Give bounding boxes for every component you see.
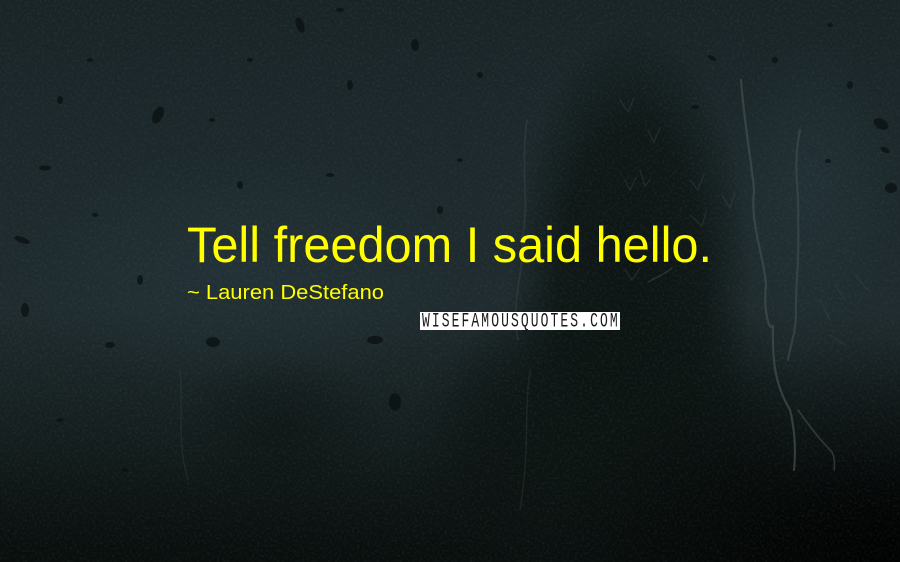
rain streaks [180,80,868,510]
quote text: Tell freedom I said hello. [187,217,712,273]
attribution: ~ Lauren DeStefano [187,282,384,304]
watermark: WISEFAMOUSQUOTES.COM [422,311,618,334]
